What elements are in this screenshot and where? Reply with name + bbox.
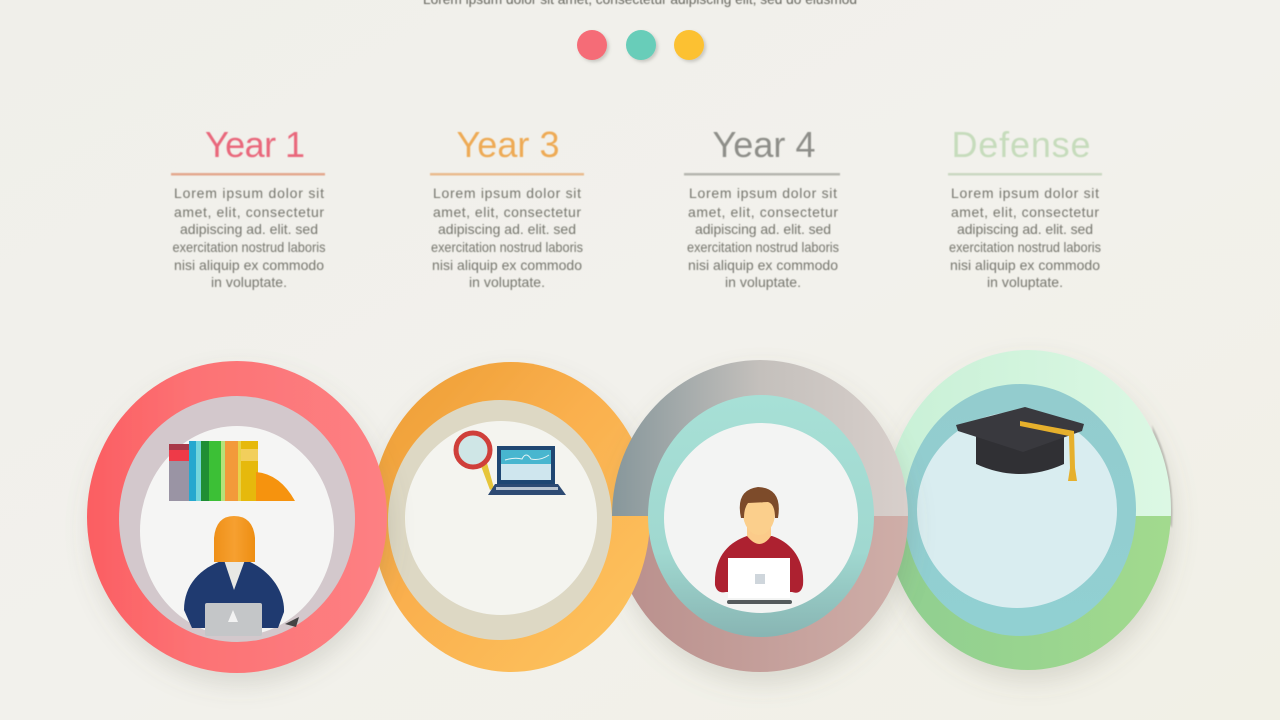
icon: woman with laptop	[184, 516, 299, 636]
heading: Year 1: Year 1	[205, 124, 305, 165]
circle 1: Year 1	[87, 361, 387, 673]
body text: exercitation nostrud laboris	[172, 239, 326, 255]
column: Year 4	[684, 124, 840, 290]
body text: in voluptate.	[469, 274, 545, 290]
outer ring	[87, 361, 387, 673]
body text: Lorem ipsum dolor sit	[433, 185, 581, 201]
inner disc	[405, 421, 597, 615]
column: Year 3	[430, 124, 584, 290]
heading: Defense: Defense	[952, 124, 1090, 165]
body text: in voluptate.	[987, 274, 1063, 290]
body text	[949, 185, 1101, 290]
body text: nisi aliquip ex commodo	[432, 257, 582, 273]
heading: Year 3: Year 3	[456, 124, 560, 165]
outer ring	[885, 350, 1171, 670]
icon: books	[169, 441, 295, 501]
middle ring	[119, 396, 355, 642]
circle 4: Defense	[885, 350, 1173, 670]
column: Year 1	[171, 124, 326, 290]
heading: Year 4: Year 4	[712, 124, 816, 165]
icon: student with laptop	[715, 487, 803, 604]
circle 2 outer top half	[378, 362, 633, 516]
body text	[687, 185, 839, 290]
body text: adipiscing ad. elit. sed	[695, 221, 831, 237]
body text: nisi aliquip ex commodo	[688, 257, 838, 273]
body text: adipiscing ad. elit. sed	[957, 221, 1093, 237]
body text: exercitation nostrud laboris	[431, 239, 583, 255]
inner disc	[917, 412, 1117, 608]
divider	[171, 173, 325, 176]
divider	[430, 173, 584, 176]
indicator dots	[577, 30, 704, 60]
inner disc	[140, 426, 334, 636]
body text	[172, 185, 326, 290]
middle ring	[648, 395, 874, 637]
outer ring bottom half	[379, 516, 650, 672]
body text: amet, elit, consectetur	[688, 204, 838, 220]
circle 3 inner	[648, 395, 874, 637]
divider	[948, 173, 1102, 176]
body text: in voluptate.	[211, 274, 287, 290]
body text: amet, elit, consectetur	[951, 204, 1099, 220]
body text: adipiscing ad. elit. sed	[438, 221, 576, 237]
body text: exercitation nostrud laboris	[687, 239, 839, 255]
middle ring	[388, 400, 612, 640]
body text: exercitation nostrud laboris	[949, 239, 1101, 255]
column: Defense	[948, 124, 1102, 290]
body text: amet, elit, consectetur	[433, 204, 581, 220]
icon: graduation cap	[956, 407, 1084, 481]
icon: magnifier and laptop	[456, 433, 566, 495]
middle ring	[904, 384, 1136, 636]
body text: nisi aliquip ex commodo	[950, 257, 1100, 273]
circle 3 outer ring	[612, 360, 908, 672]
body text: Lorem ipsum dolor sit	[689, 185, 837, 201]
divider	[684, 173, 840, 176]
body text: amet, elit, consectetur	[174, 204, 324, 220]
body text: Lorem ipsum dolor sit	[951, 185, 1099, 201]
body text: adipiscing ad. elit. sed	[180, 221, 318, 237]
body text	[431, 185, 583, 290]
inner disc	[664, 423, 858, 613]
body text: nisi aliquip ex commodo	[174, 257, 324, 273]
body text: in voluptate.	[725, 274, 801, 290]
shadow sliver	[1152, 425, 1173, 528]
circle 2: Year 3	[379, 400, 650, 672]
body text: Lorem ipsum dolor sit	[174, 185, 324, 201]
